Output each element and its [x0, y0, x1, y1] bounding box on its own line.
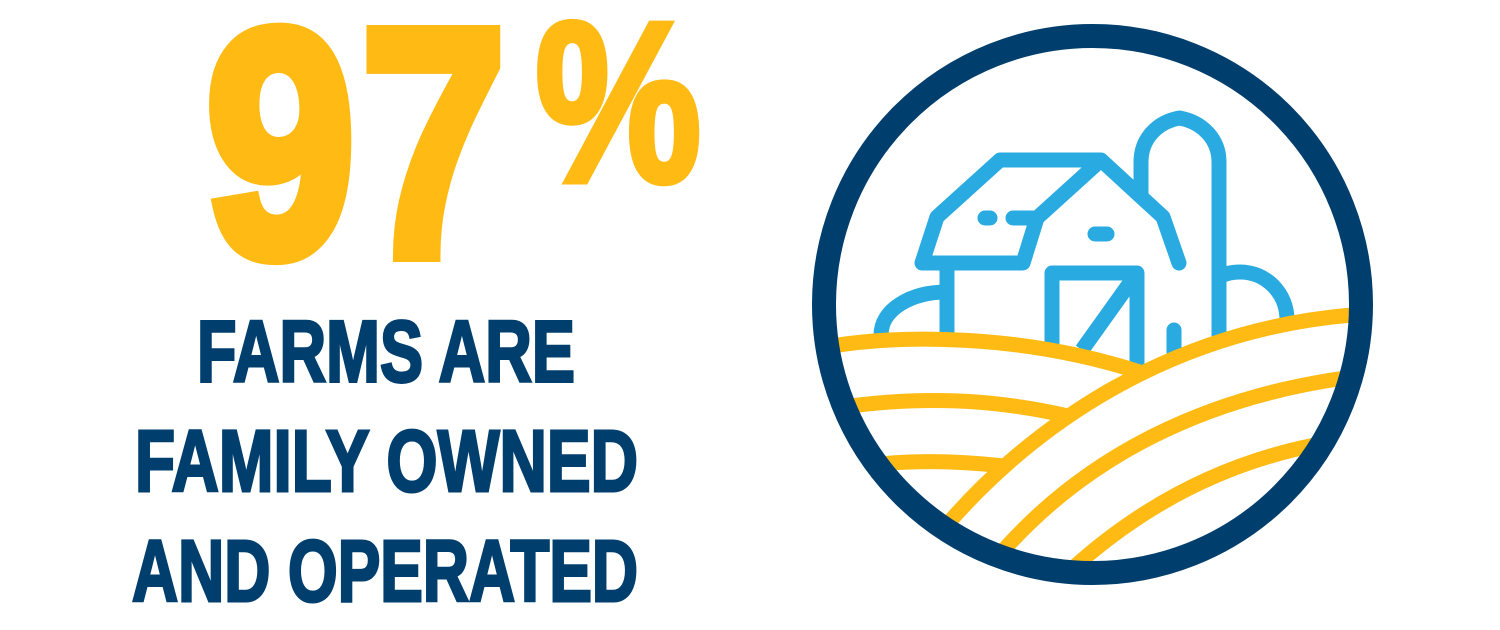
- barn post: [940, 263, 954, 335]
- caption: farms are family owned and operated: [132, 304, 638, 620]
- right shrub: [1219, 272, 1287, 320]
- furrow line 1: [1001, 378, 1345, 553]
- roof window marks: [985, 218, 1107, 234]
- caption line 1: FARMS ARE: [197, 304, 575, 400]
- silo: [1141, 118, 1219, 340]
- hill line 1: [832, 339, 1143, 373]
- headline statistic: 97%: [206, 0, 701, 326]
- field contour lines: [832, 315, 1352, 569]
- icon: barn and silo: [881, 118, 1287, 368]
- barn door: [1052, 273, 1137, 368]
- caption line 2: FAMILY OWNED: [135, 413, 638, 510]
- main hill: [945, 315, 1352, 527]
- navy ring: [824, 36, 1361, 573]
- caption line 3: AND OPERATED: [132, 523, 638, 620]
- hill line 3: [880, 462, 1004, 466]
- hill line 2: [850, 400, 1068, 416]
- icon: farm in circle: [824, 36, 1361, 573]
- left shrub: [881, 292, 947, 335]
- barn side wing roof: [922, 160, 1179, 263]
- furrow line 2: [1072, 445, 1315, 569]
- fence post: [1166, 330, 1182, 352]
